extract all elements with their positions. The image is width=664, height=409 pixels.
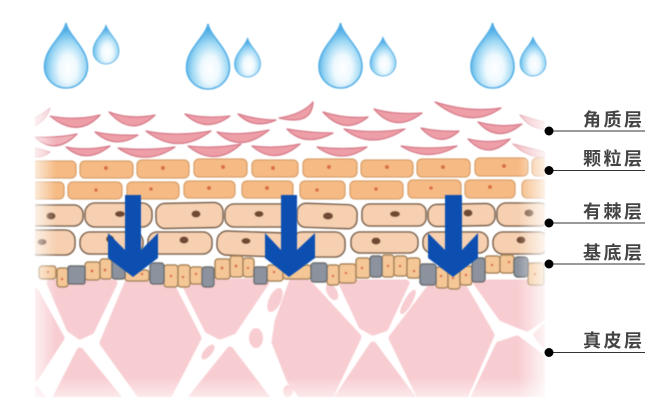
label: 有棘层: 有棘层 xyxy=(583,202,644,222)
stratum basale cells xyxy=(39,255,544,289)
icon: water drop 4 large xyxy=(471,23,514,88)
icon: water drop 2 small xyxy=(235,38,260,77)
layer labels xyxy=(544,109,645,357)
label: 真皮层: 真皮层 xyxy=(583,330,644,351)
label: 角质层 xyxy=(544,109,645,136)
icon: water drop 3 large xyxy=(319,23,362,88)
label: 基底层 xyxy=(544,242,645,268)
label: 角质层: 角质层 xyxy=(583,109,644,130)
label: 真皮层 xyxy=(544,330,645,357)
icon: water drop 2 large xyxy=(186,24,230,89)
panel: skin cross-section xyxy=(0,100,557,409)
label: 有棘层 xyxy=(544,202,645,228)
edge fades xyxy=(0,100,557,409)
stratum corneum scales xyxy=(30,102,545,157)
dermis layer xyxy=(30,282,550,409)
label: 颗粒层: 颗粒层 xyxy=(583,148,644,169)
arrow 3 xyxy=(428,195,478,277)
arrow 2 xyxy=(265,195,315,277)
icon: water drop 1 large xyxy=(44,23,88,88)
stratum granulosum cells xyxy=(30,158,552,199)
icon: water drop 4 small xyxy=(520,37,546,76)
arrow 1 xyxy=(108,195,158,277)
label: 基底层: 基底层 xyxy=(583,242,644,263)
label: 颗粒层 xyxy=(544,148,645,175)
arrows xyxy=(108,195,478,277)
icon: water drop 3 small xyxy=(370,37,396,76)
stratum spinosum cells xyxy=(26,202,549,257)
water drops xyxy=(44,23,546,89)
icon: water drop 1 small xyxy=(93,25,119,64)
